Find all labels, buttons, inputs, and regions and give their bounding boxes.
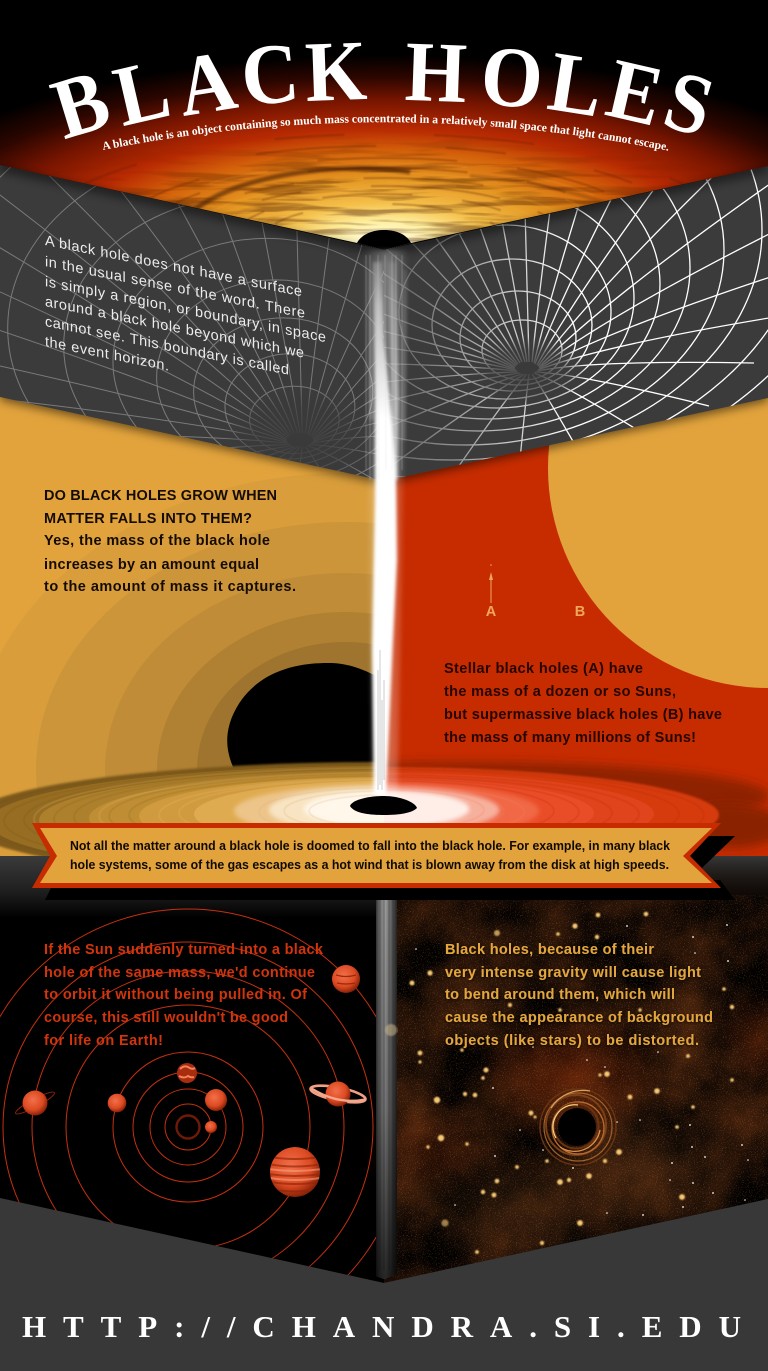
lower jet	[376, 900, 397, 1279]
title: C	[237, 24, 303, 124]
banner text	[70, 839, 671, 872]
planet: mercury	[205, 1121, 217, 1133]
central jet	[363, 250, 409, 800]
panel top shadow	[0, 165, 768, 250]
text: do black holes grow: to the amount of mass it captures.	[44, 579, 296, 595]
panel: solar system (dark)	[0, 856, 376, 1276]
text: sun scenario: hole of the same mass, we'd continue	[44, 965, 315, 981]
text: sun scenario	[44, 942, 324, 1049]
text: do black holes grow: DO BLACK HOLES GROW WHEN	[44, 488, 277, 504]
sun turned black hole	[176, 1116, 200, 1138]
text: sun scenario: course, this still wouldn't be good	[44, 1010, 288, 1026]
planet: mars	[108, 1094, 126, 1112]
text: gravitational lensing	[445, 942, 713, 1049]
footer url: HTTP://CHANDRA.SI.EDU	[22, 1309, 741, 1344]
text: sun scenario: for life on Earth!	[44, 1033, 163, 1049]
planet: saturn	[309, 1082, 367, 1106]
text: do black holes grow: MATTER FALLS INTO THEM?	[44, 511, 252, 527]
text: gravitational lensing: cause the appearance of background	[445, 1010, 713, 1026]
orbits	[0, 908, 376, 1276]
title	[41, 22, 724, 157]
text: do black holes grow: increases by an amount equal	[44, 557, 259, 573]
glowing stars	[387, 912, 734, 1254]
planet: jupiter	[268, 1147, 322, 1197]
left funnel grid	[0, 167, 384, 479]
right funnel grid	[384, 170, 768, 478]
text: stellar vs supermassive: but supermassive black holes (B) have	[444, 707, 722, 723]
title: A	[171, 31, 243, 135]
text: event horizon: cannot see. This boundary is called	[45, 314, 289, 379]
text: event horizon: in the usual sense of the word. There	[45, 254, 305, 322]
text: event horizon: A black hole does not have a surface	[45, 233, 302, 300]
concentric gravity rings	[0, 473, 720, 1067]
accretion disk: gold side	[0, 760, 384, 856]
title: K	[304, 22, 368, 120]
text: event horizon	[45, 233, 326, 379]
text: event horizon: around a black hole beyond which we	[45, 294, 304, 362]
text: event horizon: the event horizon.	[45, 334, 169, 375]
planet: uranus	[14, 1089, 56, 1117]
text: stellar vs supermassive: the mass of a dozen or so Suns,	[444, 684, 676, 700]
accretion disk burst behind title	[0, 59, 768, 250]
banner shadow	[45, 836, 735, 900]
supermassive black hole B disc	[548, 248, 768, 688]
title: B	[41, 50, 120, 157]
text: stellar vs supermassive: the mass of many millions of Suns!	[444, 730, 696, 746]
text: gravitational lensing: Black holes, because of their	[445, 942, 654, 958]
banner text: Not all the matter around a black hole is doomed to fall into the black hole. For example, in many black	[70, 839, 671, 853]
planet: venus	[205, 1089, 227, 1111]
accretion disk: red side	[384, 757, 768, 854]
panel: gold half	[0, 380, 720, 1067]
panel: red half	[384, 380, 768, 856]
panel: lensing star field	[360, 856, 768, 1286]
text: gravitational lensing: to bend around them, which will	[445, 987, 675, 1003]
title: H	[404, 23, 468, 121]
lensing black hole	[540, 1089, 616, 1165]
label B: B	[575, 604, 585, 620]
text: sun scenario: If the Sun suddenly turned into a black	[44, 942, 324, 958]
black hole silhouette	[227, 663, 384, 775]
text: stellar vs supermassive: Stellar black holes (A) have	[444, 661, 643, 677]
text: do black holes grow: Yes, the mass of the black hole	[44, 533, 270, 549]
title: S	[654, 51, 724, 155]
title: O	[477, 26, 547, 127]
text: stellar vs supermassive	[444, 661, 722, 746]
banner	[32, 823, 735, 900]
text: sun scenario: to orbit it without being pulled in. Of	[44, 987, 307, 1003]
text: gravitational lensing: objects (like stars) to be distorted.	[445, 1033, 699, 1049]
banner text: hole systems, some of the gas escapes as a hot wind that is blown away from the disk at high speeds.	[70, 858, 669, 872]
label A: A	[486, 604, 497, 620]
central black hole	[350, 796, 417, 815]
planet: neptune	[332, 965, 360, 993]
panel: curved spacetime grids	[0, 165, 768, 488]
subtitle on arc: A black hole is an object containing so much mass concentrated in a relatively small space that light cannot escape.	[103, 114, 668, 152]
white pinpoint stars	[415, 924, 749, 1216]
footer panel	[0, 1198, 768, 1371]
text: do black holes grow	[44, 488, 296, 595]
text: gravitational lensing: very intense gravity will cause light	[445, 965, 701, 981]
event horizon dome	[357, 230, 411, 250]
title: E	[599, 39, 672, 144]
planet: earth	[177, 1063, 197, 1083]
icon: stellar black hole arrow	[489, 564, 493, 603]
title: L	[105, 39, 178, 144]
title: L	[543, 32, 610, 135]
text: event horizon: is simply a region, or boundary, in space	[45, 274, 326, 346]
